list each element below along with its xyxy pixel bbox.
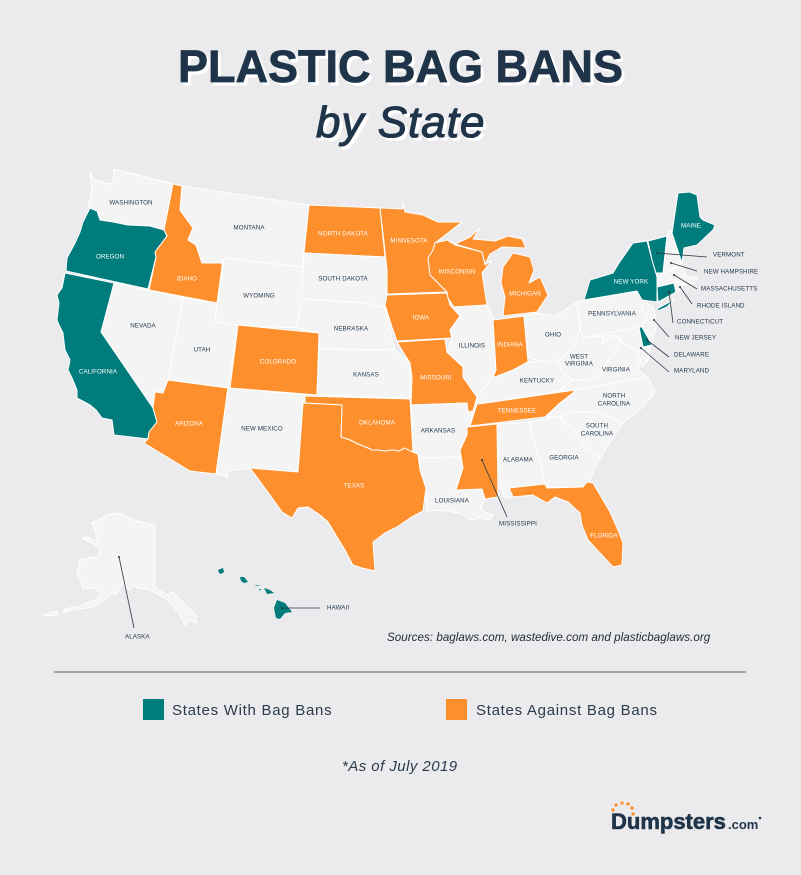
callout: Hawaii: HAWAII <box>327 604 349 612</box>
title: by State <box>316 98 485 147</box>
state: South Carolina: CAROLINA <box>581 430 614 438</box>
state: Iowa <box>385 293 460 341</box>
state: Michigan <box>455 228 548 316</box>
state: Colorado <box>230 325 319 395</box>
state: Alaska <box>43 513 196 625</box>
state: Arkansas <box>411 403 473 458</box>
state: Ohio <box>524 302 580 362</box>
state: Maryland <box>582 327 650 367</box>
map of the contiguous United States <box>57 169 715 571</box>
state: Texas: TEXAS <box>344 482 364 490</box>
state: Alabama: ALABAMA <box>503 456 534 464</box>
state: Missouri <box>397 339 477 412</box>
state: Kansas: KANSAS <box>353 372 379 378</box>
state: Indiana: INDIANA <box>497 342 524 348</box>
state: Nebraska <box>297 299 395 350</box>
callout: Delaware <box>646 339 709 358</box>
state: North Carolina <box>545 377 655 423</box>
state: Kentucky <box>477 361 572 404</box>
state: Alabama <box>497 422 545 498</box>
state: Tennessee: TENNESSEE <box>498 408 536 414</box>
state: Wisconsin: WISCONSIN <box>439 268 475 276</box>
state: Iowa: IOWA <box>413 314 430 322</box>
state: Louisiana: LOUISIANA <box>435 498 470 504</box>
state: Illinois <box>447 305 496 397</box>
state: New York <box>584 241 675 311</box>
state: Idaho <box>149 184 222 303</box>
callout: Mississippi: MISSISSIPPI <box>499 520 537 528</box>
callout: Rhode Island: RHODE ISLAND <box>697 302 745 310</box>
state: Minnesota: MINNESOTA <box>390 238 428 244</box>
state: New York: NEW YORK <box>614 278 649 286</box>
state: Oklahoma: OKLAHOMA <box>359 420 396 426</box>
callout: New Hampshire: NEW HAMPSHIRE <box>704 268 758 276</box>
state: California <box>57 273 157 439</box>
logo: Dumpsters.com: .com <box>728 817 758 832</box>
logo: Dumpsters.com: Dumpsters <box>611 809 726 834</box>
state: Illinois: ILLINOIS <box>459 342 485 350</box>
legend: states with bag bans: States With Bag Bans <box>172 702 332 719</box>
callout: Delaware: DELAWARE <box>674 352 709 358</box>
state: Tennessee <box>470 390 575 426</box>
state: West Virginia: VIRGINIA <box>565 360 594 368</box>
legend: states against bag bans: States Against Bag Bans <box>476 702 658 719</box>
state: North Carolina: NORTH <box>603 392 625 400</box>
state: Wyoming: WYOMING <box>243 292 275 300</box>
state: South Dakota: SOUTH DAKOTA <box>318 276 369 282</box>
state: New Mexico: NEW MEXICO <box>241 426 283 432</box>
sources note: Sources: baglaws.com, wastedive.com and plasticbaglaws.org <box>387 631 711 644</box>
state: California: CALIFORNIA <box>79 368 118 376</box>
state: New Mexico <box>216 388 305 477</box>
state: South Carolina: SOUTH <box>586 422 608 430</box>
state: Wyoming <box>215 258 302 328</box>
state: North Carolina: CAROLINA <box>598 400 631 408</box>
state: Connecticut <box>657 283 676 302</box>
callout: Alaska: ALASKA <box>125 634 150 640</box>
state: Georgia: GEORGIA <box>549 454 580 462</box>
state: Pennsylvania <box>577 291 647 338</box>
state: West Virginia: WEST <box>570 354 588 360</box>
callout: Vermont: VERMONT <box>713 252 745 258</box>
callout: New Jersey: NEW JERSEY <box>675 334 716 342</box>
callout: Alaska <box>118 556 150 640</box>
state: West Virginia <box>557 335 622 380</box>
state: Florida: FLORIDA <box>590 532 619 540</box>
state: Delaware <box>639 327 652 347</box>
state: Georgia <box>529 417 600 488</box>
callout: New Jersey <box>653 319 716 342</box>
state: Arkansas: ARKANSAS <box>421 428 455 434</box>
state: Virginia: VIRGINIA <box>602 366 631 374</box>
callout: Rhode Island <box>679 286 745 310</box>
callout: Massachusetts <box>673 274 757 292</box>
callout: Vermont <box>656 252 745 258</box>
state: Oklahoma <box>305 396 418 454</box>
state: Arizona: ARIZONA <box>175 420 204 428</box>
state: Nebraska: NEBRASKA <box>334 326 369 332</box>
legend: states with bag bans <box>143 699 332 720</box>
state: Montana <box>180 186 309 267</box>
state: Wisconsin <box>428 240 492 307</box>
title: by State <box>319 101 488 150</box>
state: Oregon: OREGON <box>96 254 124 260</box>
callout: New Hampshire <box>670 262 758 276</box>
state: Pennsylvania: PENNSYLVANIA <box>588 310 637 318</box>
state: Oregon <box>66 208 167 289</box>
state: Maine: MAINE <box>681 222 701 230</box>
state: Florida <box>509 482 623 567</box>
state: Maine <box>672 192 715 263</box>
callout: Mississippi <box>481 459 537 528</box>
callout: Connecticut <box>668 291 723 326</box>
state: Kentucky: KENTUCKY <box>520 378 554 384</box>
state: Nevada <box>101 283 183 408</box>
state: Washington: WASHINGTON <box>109 200 153 206</box>
state: Utah <box>168 298 238 388</box>
state: Indiana <box>492 316 528 379</box>
state: Arizona <box>144 380 228 474</box>
callout: Maryland <box>640 347 710 374</box>
state: Texas <box>250 403 426 571</box>
state: North Dakota: NORTH DAKOTA <box>318 230 369 238</box>
state: Montana: MONTANA <box>233 224 265 232</box>
state: Hawaii islands <box>218 568 292 619</box>
state: Vermont <box>648 236 667 273</box>
legend <box>143 699 658 720</box>
state: Ohio: OHIO <box>545 332 561 338</box>
state: North Dakota <box>304 205 385 257</box>
title <box>178 41 626 150</box>
state: South Dakota <box>302 253 388 308</box>
title: PLASTIC BAG BANS <box>178 41 623 92</box>
state: Massachusetts <box>657 267 697 287</box>
state: Virginia <box>560 335 648 391</box>
date footnote: *As of July 2019 <box>342 758 458 775</box>
state: Colorado: COLORADO <box>260 358 296 366</box>
legend: states against bag bans <box>446 699 658 720</box>
state: Minnesota <box>380 202 462 294</box>
callout: Massachusetts: MASSACHUSETTS <box>701 286 757 292</box>
callout: Maryland: MARYLAND <box>674 368 710 374</box>
state: Kansas <box>317 349 410 398</box>
state: Utah: UTAH <box>194 346 210 354</box>
callouts for small states <box>118 252 758 640</box>
state: Louisiana <box>419 457 493 520</box>
state: New Jersey <box>642 300 657 343</box>
state: Rhode Island <box>674 281 682 292</box>
state: Mississippi <box>456 424 498 499</box>
state: Michigan: MICHIGAN <box>509 290 541 298</box>
state: South Carolina <box>560 412 623 458</box>
callout: Hawaii <box>281 604 349 612</box>
callout: Connecticut: CONNECTICUT <box>677 318 723 326</box>
logo: Dumpsters.com <box>611 802 761 834</box>
state: Idaho: IDAHO <box>177 276 197 282</box>
title: PLASTIC BAG BANS <box>181 44 626 95</box>
state: Washington <box>88 169 173 230</box>
state: New Hampshire <box>663 230 682 274</box>
state: Missouri: MISSOURI <box>420 374 452 382</box>
state: Nevada: NEVADA <box>130 322 157 330</box>
